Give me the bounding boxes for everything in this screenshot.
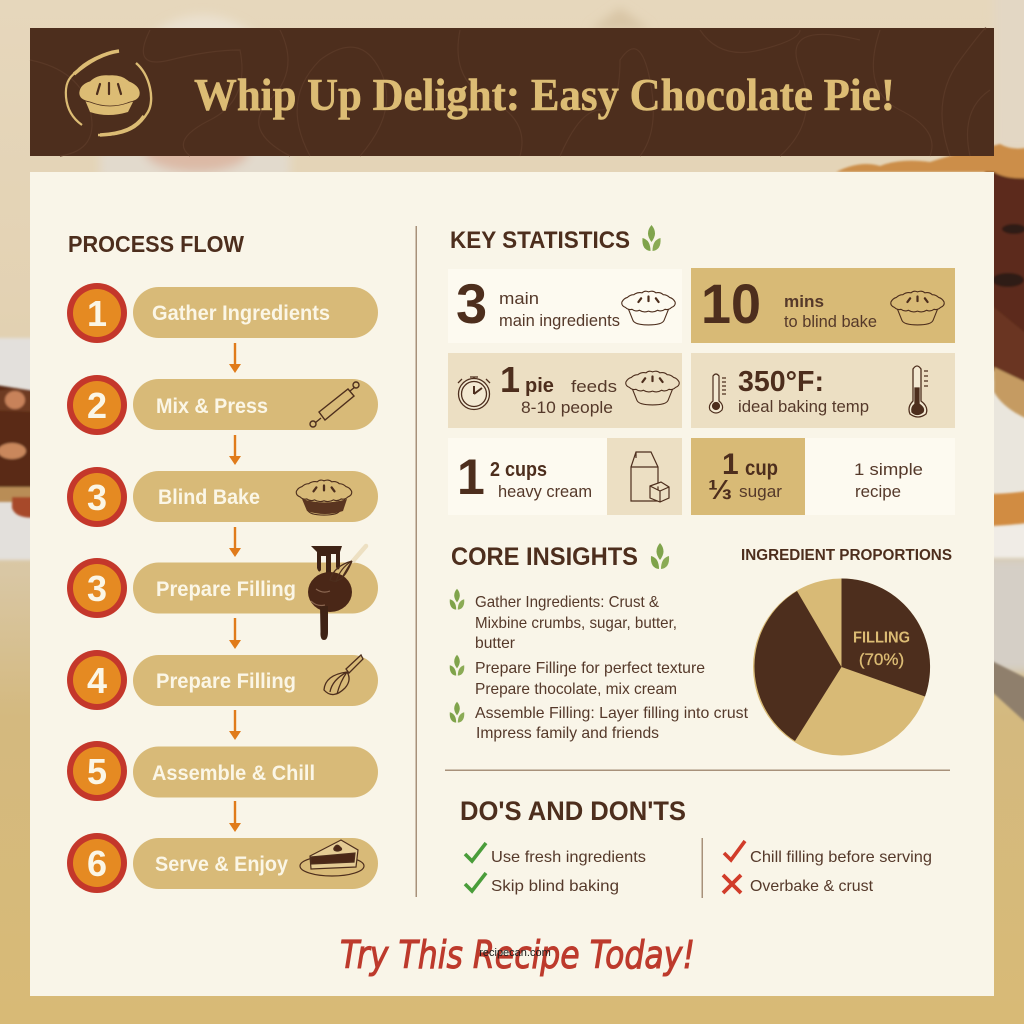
- step 7: 6: [87, 843, 107, 884]
- don't: overbake crust: Overbake & crust: [750, 878, 874, 895]
- insight 1: Gather Ingredients: Crust &: [475, 594, 659, 611]
- horizontal divider: [445, 770, 950, 771]
- stat: 10 mins: to blind bake: [784, 312, 877, 331]
- arrow 5: [229, 710, 241, 740]
- call to action: Try This Recipe Today!: [340, 933, 695, 977]
- panel: core insights: [450, 543, 749, 742]
- insight 3: [450, 702, 749, 742]
- icon: rolling pin: [310, 382, 359, 427]
- chart title: INGREDIENT PROPORTIONS: [741, 547, 952, 564]
- step 6: Assemble & Chill: [152, 762, 315, 785]
- icon: pie slice: [300, 840, 364, 876]
- step 2: 2: [87, 385, 107, 426]
- red check: chill filling: [724, 841, 932, 866]
- icon: pie: [891, 291, 944, 325]
- stat: 1 pie feeds 8-10 people: pie: [525, 375, 554, 397]
- step 3: 3: [87, 477, 107, 518]
- icon: pie emblem: [66, 51, 151, 135]
- step 2: Mix & Press: [156, 395, 268, 418]
- do: skip blind baking: [465, 873, 619, 895]
- icon: milk carton and sugar cube: [631, 452, 669, 502]
- step 3: Blind Bake: [158, 486, 260, 509]
- arrow 1: [229, 343, 241, 373]
- don't: overbake crust: [723, 875, 874, 895]
- heading: core insights: CORE INSIGHTS: [451, 543, 638, 571]
- step 1: [67, 283, 378, 343]
- step 2: [67, 375, 378, 435]
- stat: 1 simple recipe: 1 simple: [854, 460, 923, 479]
- stat: 2 cups heavy cream: [448, 438, 682, 515]
- stat: 2 cups heavy cream: heavy cream: [498, 482, 592, 501]
- step 7: Serve & Enjoy: [155, 853, 288, 876]
- heading: do's and don'ts: DO'S AND DON'TS: [460, 796, 686, 826]
- vertical divider: [416, 226, 417, 897]
- stat: 1 cup sugar: sugar: [739, 482, 782, 501]
- stat: 3 main ingredients: 3: [456, 272, 487, 335]
- do: use fresh ingredients: [465, 843, 646, 866]
- insight 1: butter: [475, 635, 516, 652]
- stat: 1 pie feeds 8-10 people: feeds: [571, 377, 617, 396]
- do: use fresh ingredients: Use fresh ingredients: [491, 849, 646, 866]
- step 4: Prepare Filling: [156, 578, 296, 601]
- stat: 1 cup sugar: cup: [745, 457, 778, 480]
- stat: 1 cup sugar: 1: [722, 448, 739, 481]
- step 6: 5: [87, 751, 107, 792]
- panel: do's and don'ts: [460, 796, 932, 898]
- icon: pie: [626, 371, 679, 405]
- chart: ingredient proportions: [741, 547, 952, 756]
- stat: 10 mins: mins: [784, 292, 824, 311]
- pie chart: [753, 578, 930, 756]
- step 6: [67, 741, 378, 801]
- step 4: 3: [87, 568, 107, 609]
- insight 2: Prepare thocolate, mix cream: [475, 681, 677, 698]
- stat: 1 pie feeds 8-10 people: 1: [500, 359, 520, 400]
- stat: 3 main ingredients: [448, 269, 682, 343]
- insight 3: Impress family and friends: [476, 725, 659, 742]
- pie chart: FILLING: [853, 630, 910, 646]
- stat: 1 pie feeds 8-10 people: [448, 353, 682, 428]
- step 7: [67, 833, 378, 893]
- step 5: 4: [87, 660, 107, 701]
- icon: chocolate and whisk: [308, 546, 366, 640]
- icon: whisk: [324, 655, 363, 695]
- stat: 1 simple recipe: [805, 438, 955, 515]
- insight 2: [450, 655, 705, 698]
- panel: process flow: [67, 231, 378, 893]
- step 5: [67, 650, 378, 710]
- icon: leaf: [651, 543, 669, 569]
- step 3: [67, 467, 378, 527]
- icon: stopwatch: [458, 377, 490, 410]
- red check: chill filling: Chill filling before serving: [750, 849, 932, 866]
- stat: 1 cup sugar: ⅓: [708, 474, 732, 505]
- stat: 2 cups heavy cream: 1: [457, 449, 485, 505]
- panel: key statistics: [448, 225, 955, 515]
- insight 1: [450, 589, 677, 652]
- insight 1: Mixbine crumbs, sugar, butter,: [475, 615, 677, 632]
- icon: thermometer large: [909, 366, 928, 417]
- header banner: [30, 28, 994, 156]
- watermark: recipecan.com: [479, 947, 551, 959]
- stat: 1 pie feeds 8-10 people: 8-10 people: [521, 398, 613, 417]
- stat: 10 mins: 10: [701, 272, 761, 335]
- stat: 350F baking temp: 350°F:: [738, 366, 824, 398]
- do: skip blind baking: Skip blind baking: [491, 878, 619, 895]
- stat: 350F baking temp: ideal baking temp: [738, 397, 869, 416]
- insight 2: Prepare Filliŋe for perfect texture: [475, 660, 705, 677]
- step 1: 1: [87, 293, 107, 334]
- insight 3: Assemble Filling: Layer filling into crust: [475, 705, 749, 722]
- heading: process flow: PROCESS FLOW: [68, 231, 244, 257]
- icon: pie: [622, 291, 675, 325]
- arrow 4: [229, 618, 241, 649]
- stat: 10 mins: [691, 268, 955, 343]
- stat: 2 cups heavy cream: 2 cups: [490, 459, 547, 481]
- icon: pie: [296, 480, 352, 515]
- stat: 1 cup sugar: [691, 438, 805, 515]
- arrow 2: [229, 435, 241, 465]
- stat: 3 main ingredients: main ingredients: [499, 311, 620, 330]
- title: Whip Up Delight: Easy Chocolate Pie!: [194, 70, 895, 120]
- stat: 350F baking temp: [691, 353, 955, 428]
- heading: key statistics: KEY STATISTICS: [450, 227, 630, 254]
- step 1: Gather Ingredients: [152, 302, 330, 325]
- step 4: [67, 546, 378, 640]
- step 5: Prepare Filling: [156, 670, 296, 693]
- arrow 6: [229, 801, 241, 832]
- stat: 1 simple recipe: recipe: [855, 482, 901, 501]
- main content card: [30, 172, 994, 996]
- icon: thermometer: [709, 374, 726, 413]
- arrow 3: [229, 527, 241, 557]
- stat: 3 main ingredients: main: [499, 289, 539, 308]
- icon: leaf: [642, 225, 661, 251]
- pie chart: (70%): [859, 650, 904, 669]
